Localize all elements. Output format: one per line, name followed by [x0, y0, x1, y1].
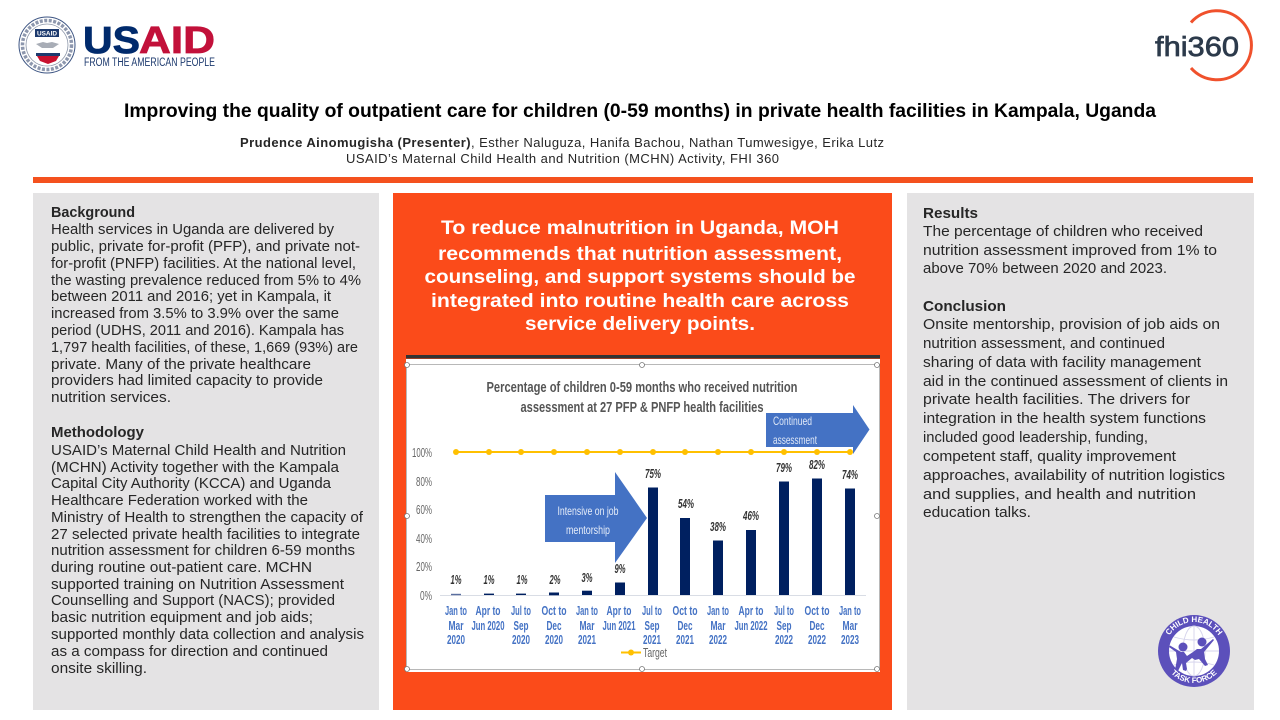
- x axis category labels: 2020: [512, 633, 530, 647]
- arrow: intensive on job mentorship: [545, 472, 647, 563]
- text block: conclusion: aid in the continued assessment of clients in: [923, 374, 1228, 390]
- text block: methodology: [51, 443, 364, 677]
- text block: methodology: as a compass for direction and continued: [51, 644, 328, 660]
- heading: conclusion: Conclusion: [923, 299, 1006, 315]
- arrow: continued assessment: [766, 405, 870, 454]
- callout: key message: To reduce malnutrition in Uganda, MOH: [441, 217, 839, 239]
- USAID wordmark: US: [83, 20, 140, 62]
- x axis: [440, 594, 866, 596]
- logo wordmark: fhi360: [1155, 31, 1239, 62]
- x axis category labels: 2022: [709, 633, 727, 647]
- text block: background: for-profit (PNFP) facilities. At the national level,: [51, 256, 356, 272]
- text block: background: [51, 222, 361, 406]
- legend: target: [621, 645, 667, 660]
- text block: results: above 70% between 2020 and 2023.: [923, 261, 1167, 277]
- text block: methodology: USAID’s Maternal Child Health and Nutrition: [51, 443, 346, 459]
- callout: key message: counseling, and support systems should be: [424, 266, 856, 288]
- text block: conclusion: Onsite mentorship, provision of job aids on: [923, 317, 1220, 333]
- logo ring: [1191, 11, 1251, 80]
- x axis category labels: 2022: [808, 633, 826, 647]
- callout: key message: service delivery points.: [525, 313, 755, 335]
- text block: methodology: onsite skilling.: [51, 661, 147, 677]
- text block: methodology: supported training on Nutrition Assessment: [51, 577, 344, 593]
- text block: conclusion: and supplies, and health and nutrition: [923, 487, 1196, 503]
- value labels: 54%: [678, 496, 694, 511]
- value labels: 3%: [582, 570, 593, 585]
- x axis category labels: [445, 604, 861, 647]
- text block: background: public, private for-profit (PFP), and private not-: [51, 239, 360, 255]
- text block: background: private. Many of the private healthcare: [51, 357, 311, 373]
- x axis category labels: Apr to: [606, 604, 632, 618]
- text block: background: the wasting prevalence reduced from 5% to 4%: [51, 273, 361, 289]
- authors: [240, 135, 884, 166]
- text block: conclusion: [923, 317, 1228, 521]
- header divider: [33, 177, 1253, 183]
- value labels: 9%: [614, 561, 626, 576]
- x axis category labels: Oct to: [804, 604, 830, 618]
- chart frame: [404, 355, 880, 672]
- logo: USAID: [19, 17, 215, 73]
- text block: methodology: (MCHN) Activity together with the Kampala: [51, 460, 340, 476]
- text block: methodology: Counselling and Support (NACS); provided: [51, 593, 335, 609]
- figures: [1169, 638, 1214, 671]
- panel: background and methodology: [33, 193, 379, 710]
- x axis category labels: Oct to: [672, 604, 698, 618]
- text block: methodology: Capital City Authority (KCCA) and Uganda: [51, 476, 332, 492]
- x axis category labels: Jul to: [511, 604, 531, 618]
- x axis category labels: Dec: [810, 619, 825, 633]
- x axis category labels: Jan to: [839, 604, 861, 618]
- panel: results and conclusion: [907, 193, 1254, 710]
- text block: background: between 2011 and 2016; yet in Kampala, it: [51, 289, 331, 305]
- panel background: [393, 193, 892, 710]
- value labels: 1%: [484, 572, 495, 587]
- y axis labels: 40%: [416, 531, 432, 546]
- USAID tagline: FROM THE AMERICAN PEOPLE: [84, 57, 215, 69]
- x axis category labels: Jan to: [576, 604, 598, 618]
- x axis category labels: Dec: [546, 619, 562, 633]
- heading: methodology: Methodology: [51, 425, 145, 441]
- x axis category labels: Jan to: [445, 604, 467, 618]
- chart title: assessment at 27 PFP & PNFP health facilities: [520, 399, 764, 416]
- x axis category labels: Sep: [776, 619, 792, 633]
- value labels: 2%: [549, 572, 561, 587]
- text block: background: providers had limited capacity to provide: [51, 373, 323, 389]
- text block: methodology: supported monthly data collection and analysis: [51, 627, 364, 643]
- heading: background: Background: [51, 205, 135, 221]
- x axis category labels: 2021: [643, 633, 661, 647]
- callout: key message: [424, 217, 856, 335]
- x axis category labels: Jul to: [774, 604, 794, 618]
- logo: FHI 360: [1155, 11, 1251, 80]
- x axis category labels: Mar: [710, 619, 726, 633]
- text block: conclusion: competent staff, quality improvement: [923, 449, 1176, 465]
- affiliation: USAID’s Maternal Child Health and Nutrition (MCHN) Activity, FHI 360: [346, 151, 779, 166]
- text block: results: nutrition assessment improved from 1% to: [923, 243, 1217, 259]
- x axis category labels: Apr to: [738, 604, 764, 618]
- x axis category labels: Mar: [842, 619, 858, 633]
- value labels: 79%: [776, 460, 792, 475]
- x axis category labels: 2021: [578, 633, 596, 647]
- presenter and co-authors: Prudence Ainomugisha (Presenter), Esther Naluguza, Hanifa Bachou, Nathan Tumwesigye, Erika Lutz: [240, 135, 884, 150]
- text block: methodology: 27 selected private health facilities to integrate: [51, 527, 360, 543]
- title: Improving the quality of outpatient care for children (0-59 months) in private health facilities in Kampala, Uganda: [124, 101, 1156, 122]
- text block: conclusion: approaches, availability of nutrition logistics: [923, 468, 1225, 484]
- x axis category labels: Jan to: [707, 604, 729, 618]
- x axis category labels: Mar: [580, 619, 595, 633]
- callout: key message: integrated into routine health care across: [431, 290, 849, 312]
- text block: conclusion: integration in the health system functions: [923, 411, 1206, 427]
- y axis labels: 100%: [412, 445, 432, 460]
- value labels: 1%: [450, 572, 462, 587]
- legend: target: Target: [643, 645, 667, 660]
- value labels: 74%: [842, 467, 858, 482]
- value labels: 38%: [710, 519, 726, 534]
- value labels: 1%: [516, 572, 528, 587]
- value labels: 46%: [742, 508, 759, 523]
- x axis category labels: 2022: [775, 633, 793, 647]
- x axis category labels: Jun 2022: [734, 619, 768, 633]
- text block: conclusion: private health facilities. The drivers for: [923, 392, 1190, 408]
- text block: methodology: nutrition assessment for children 6-59 months: [51, 543, 355, 559]
- y axis labels: 60%: [416, 502, 432, 517]
- badge text: [1166, 616, 1223, 683]
- text block: background: 1,797 health facilities, of these, 1,669 (93%) are: [51, 340, 358, 356]
- chart title: Percentage of children 0-59 months who received nutrition: [486, 379, 798, 396]
- bar chart: percentage of children assessed: [404, 355, 880, 672]
- text block: conclusion: education talks.: [923, 505, 1031, 521]
- arrow: continued assessment: Continued: [773, 414, 812, 428]
- text block: methodology: Healthcare Federation worked with the: [51, 493, 308, 509]
- panel: key message and chart: [393, 193, 892, 710]
- panel background: [33, 193, 379, 710]
- text block: background: period (UDHS, 2011 and 2016). Kampala has: [51, 323, 344, 339]
- x axis category labels: Apr to: [476, 604, 501, 618]
- x axis category labels: Jun 2021: [602, 619, 636, 633]
- bars: [451, 478, 855, 595]
- chart title: [486, 379, 798, 416]
- x axis category labels: 2023: [841, 633, 859, 647]
- arrow: intensive on job mentorship: Intensive on job: [558, 504, 619, 518]
- y axis labels: 0%: [420, 588, 432, 603]
- callout: key message: recommends that nutrition assessment,: [438, 243, 842, 265]
- y axis labels: [412, 445, 432, 603]
- badge text: TASK FORCE: [1172, 669, 1217, 683]
- text block: background: Health services in Uganda are delivered by: [51, 222, 335, 238]
- logo: Child Health Task Force: [1158, 615, 1230, 687]
- badge disc: [1158, 615, 1230, 687]
- heading: results: Results: [923, 206, 978, 222]
- target line: [453, 449, 853, 455]
- x axis category labels: 2021: [676, 633, 694, 647]
- text block: conclusion: sharing of data with facility management: [923, 355, 1201, 371]
- arrow: continued assessment: assessment: [773, 433, 817, 447]
- badge text: CHILD HEALTH: [1166, 616, 1223, 636]
- text block: methodology: during routine out-patient care. MCHN: [51, 560, 312, 576]
- value labels: 82%: [809, 457, 825, 472]
- x axis category labels: Jul to: [642, 604, 662, 618]
- value labels: 75%: [645, 466, 661, 481]
- text block: conclusion: included good leadership, funding,: [923, 430, 1148, 446]
- x axis category labels: Dec: [678, 619, 693, 633]
- value labels: [450, 457, 858, 587]
- text block: methodology: Ministry of Health to strengthen the capacity of: [51, 510, 364, 526]
- text block: background: nutrition services.: [51, 390, 171, 406]
- y axis labels: 20%: [416, 559, 432, 574]
- panel background: [907, 193, 1254, 710]
- x axis category labels: 2020: [545, 633, 563, 647]
- y axis labels: 80%: [416, 474, 432, 489]
- x axis category labels: Sep: [644, 619, 660, 633]
- x axis category labels: Mar: [448, 619, 464, 633]
- text block: results: The percentage of children who received: [923, 224, 1203, 240]
- text block: results: [923, 224, 1217, 277]
- icon: USAID seal: [19, 17, 75, 73]
- x axis category labels: 2020: [447, 633, 465, 647]
- x axis category labels: Sep: [514, 619, 529, 633]
- text block: conclusion: nutrition assessment, and continued: [923, 336, 1165, 352]
- x axis category labels: Oct to: [542, 604, 567, 618]
- text block: methodology: basic nutrition equipment and job aids;: [51, 610, 313, 626]
- USAID wordmark: [83, 20, 215, 62]
- arrow: intensive on job mentorship: mentorship: [566, 523, 610, 537]
- text block: background: increased from 3.5% to 3.9% over the same: [51, 306, 339, 322]
- icon: USAID seal: USAID: [37, 32, 58, 38]
- x axis category labels: Jun 2020: [472, 619, 505, 633]
- USAID wordmark: AID: [139, 20, 215, 62]
- globe: [1169, 626, 1219, 676]
